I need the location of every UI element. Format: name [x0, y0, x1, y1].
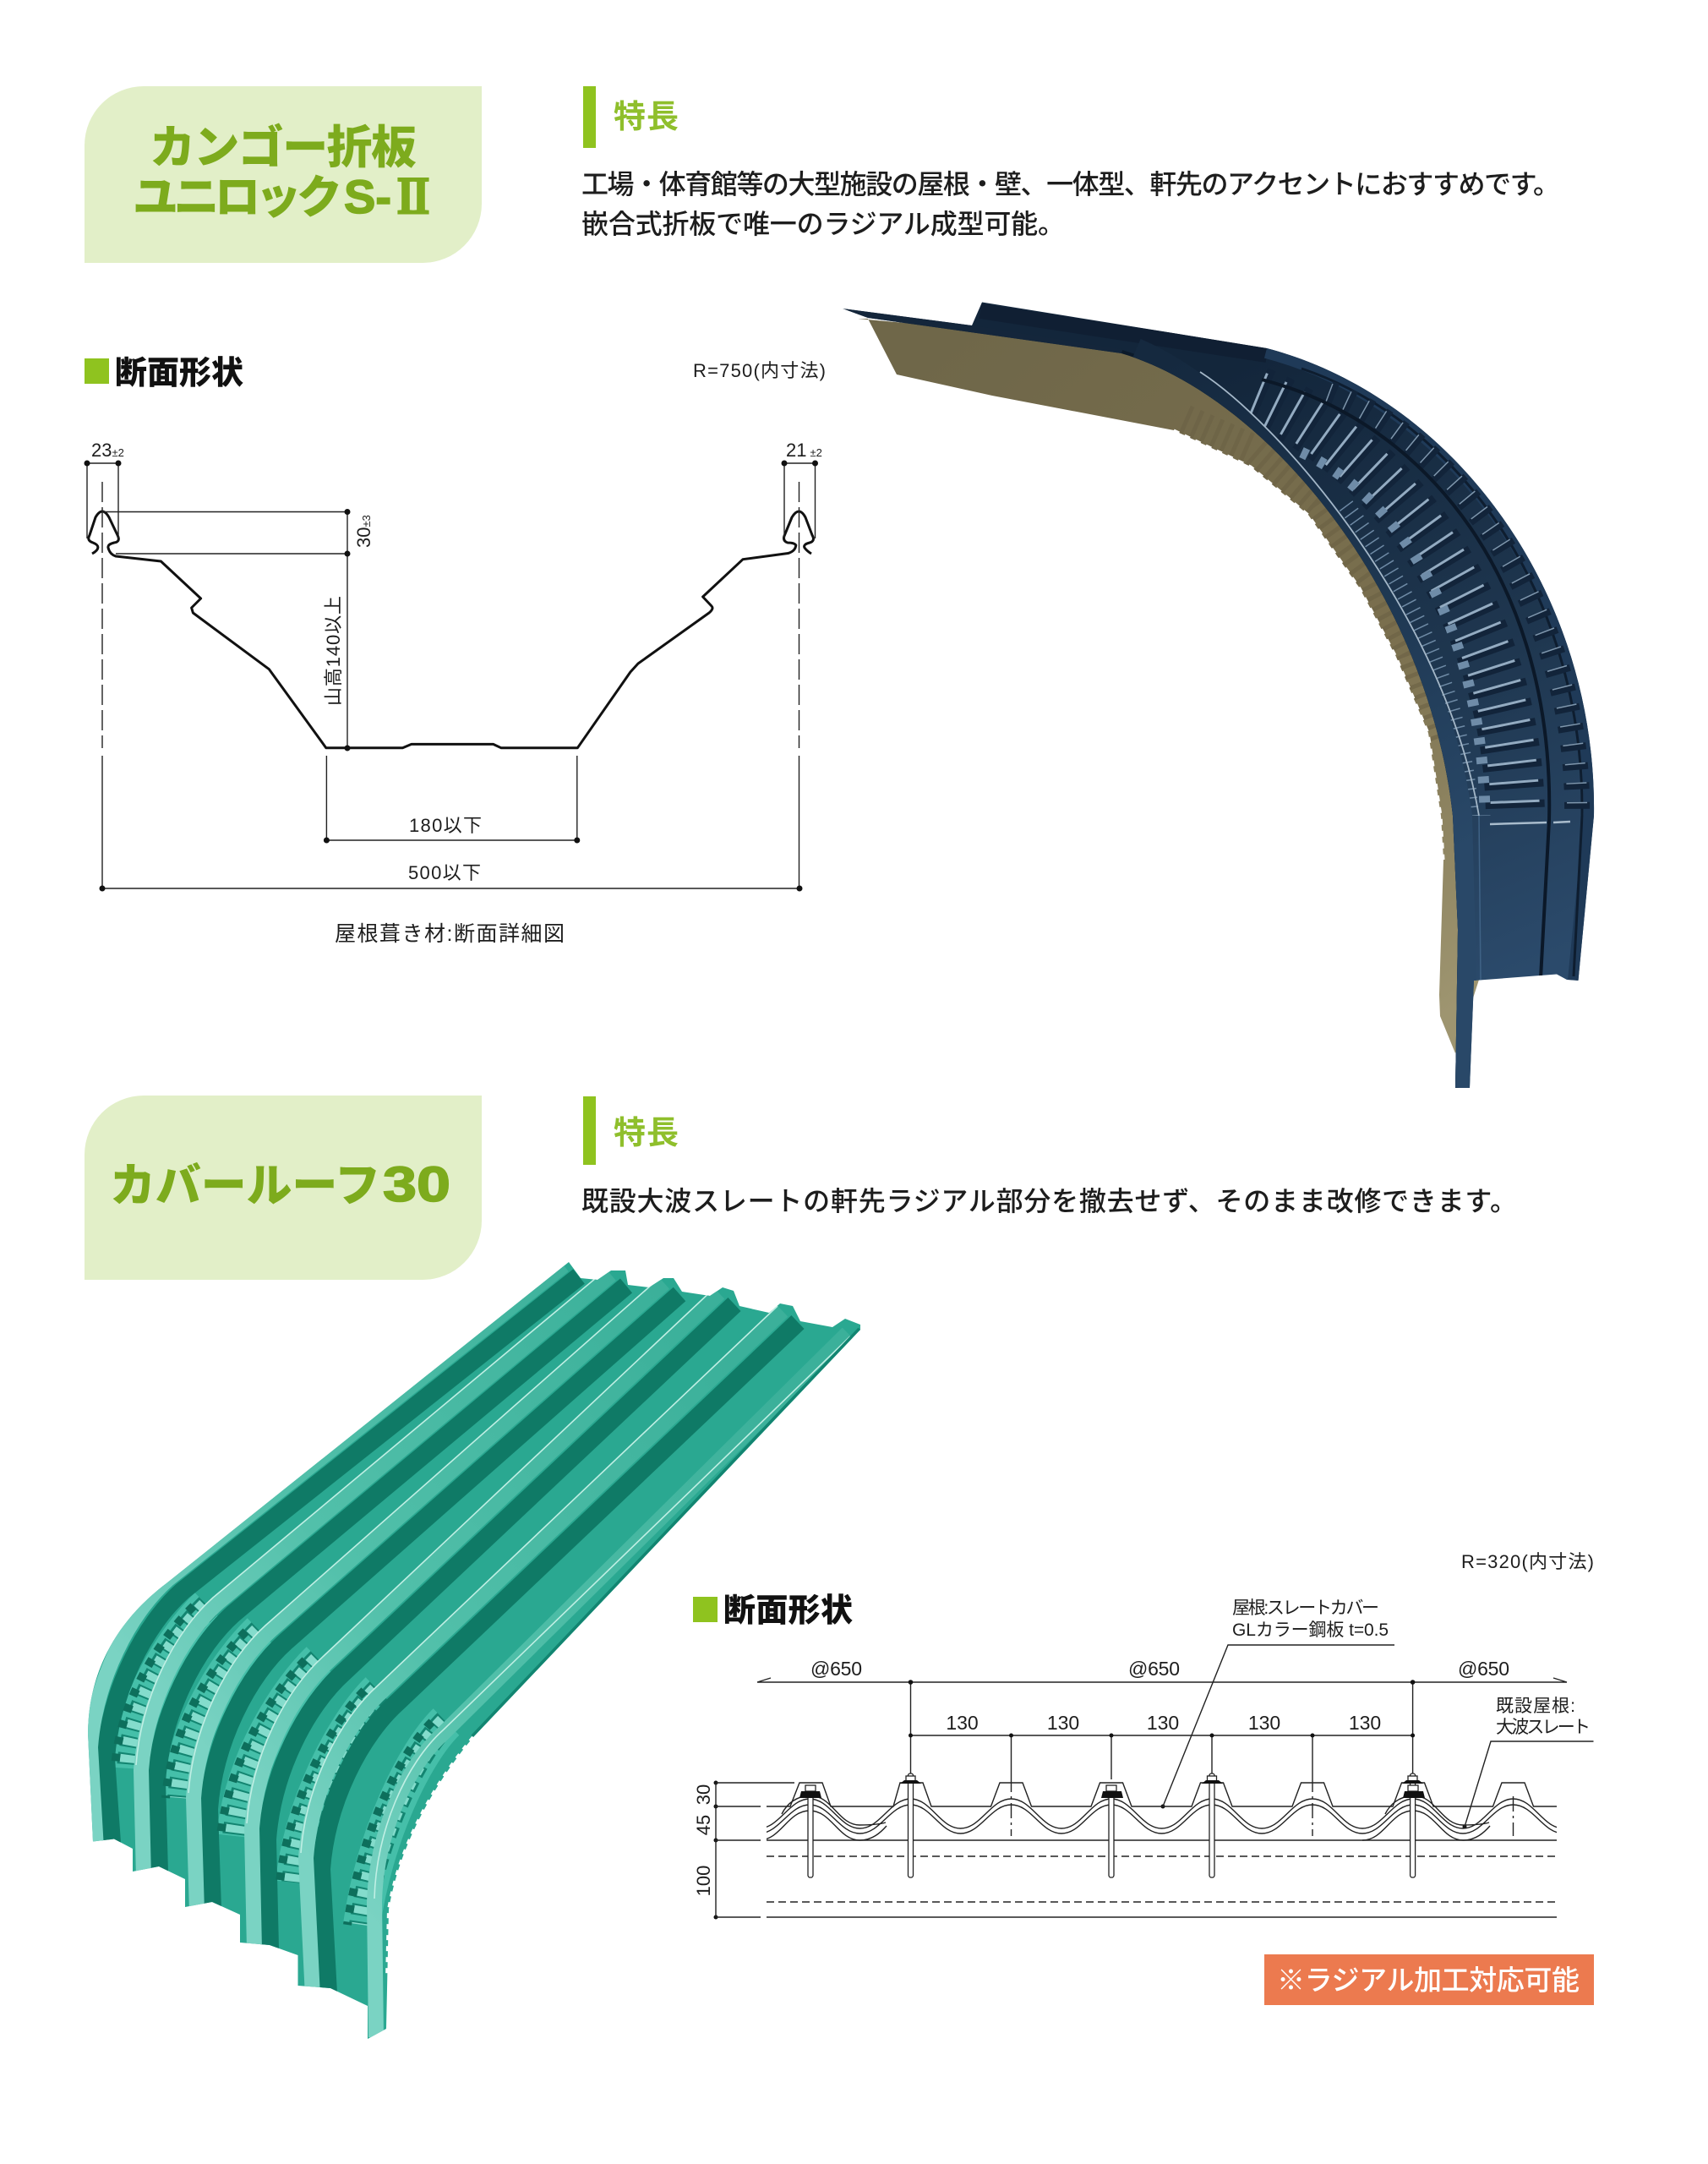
heading: features: 特長 [614, 100, 679, 135]
labels: 650 pitch: @650 [1128, 1658, 1180, 1680]
chart: unilock cross-section drawing [85, 440, 822, 946]
panel: product 2 features [581, 1096, 1517, 1216]
label: existing roof line 2: 大波スレート [1496, 1718, 1591, 1737]
leader: existing roof label [1465, 1741, 1594, 1827]
labels: 130 spacing: 130 [1349, 1712, 1381, 1734]
labels: 650 pitch: @650 [1458, 1658, 1509, 1680]
photo: navy radial folded panel [843, 303, 1594, 1088]
title: kango orihan: カンゴー折板 [150, 122, 417, 173]
text block: feature line: 既設大波スレートの軒先ラジアル部分を撤去せず、そのまま改修できます。 [581, 1186, 1517, 1216]
label: 21 plus-minus 2: 21 ±2 [786, 440, 822, 461]
callout: radial processing available: ※ラジアル加工対応可能 [1277, 1965, 1580, 1996]
panel: product 1 title card [85, 86, 482, 263]
title: number 30: 30 [383, 1157, 450, 1212]
labels: height dimensions: 30 [693, 1784, 714, 1805]
panel: product 2 title card [85, 1096, 482, 1280]
labels: height dimensions: 45 [693, 1815, 714, 1835]
panel: product 1 features [581, 86, 1560, 239]
label: roof cover material line 1: 屋根:スレートカバー [1232, 1598, 1379, 1618]
photo: green cover roof sheet [88, 1262, 860, 2039]
labels: 130 spacing: 130 [1248, 1712, 1280, 1734]
title: unilock: ユニロック [133, 172, 342, 223]
label: 500 or less: 500以下 [408, 862, 481, 883]
labels: 130 spacing [946, 1712, 1381, 1734]
text: radius note 2: R=320(内寸法) [1461, 1551, 1594, 1572]
chart: cover roof cross-section drawing [693, 1598, 1594, 1919]
title: roman numeral II: Ⅱ [392, 172, 434, 223]
label: ridge height: 山高140以上 [323, 596, 344, 706]
title: S-: S- [344, 170, 391, 223]
heading: cross-section shape 1: 断面形状 [115, 356, 243, 391]
text block: feature line 2: 嵌合式折板で唯一のラジアル成型可能。 [581, 209, 1065, 239]
labels: 650 pitch [810, 1658, 1509, 1680]
text block: feature line 1: 工場・体育館等の大型施設の屋根・壁、一体型、軒先のアクセントにおすすめです。 [581, 169, 1560, 199]
label: 30 plus-minus 3: 30±3 [353, 515, 374, 548]
label: roof cover material line 2: GLカラー鋼板 t=0.5 [1232, 1620, 1389, 1640]
text: radius note 1: R=750(内寸法) [693, 360, 826, 381]
label: 23 plus-minus 2: 23±2 [91, 440, 124, 461]
labels: 130 spacing: 130 [1147, 1712, 1179, 1734]
leader: roof label [1163, 1645, 1394, 1806]
labels: height dimensions [693, 1784, 714, 1896]
labels: 130 spacing: 130 [1047, 1712, 1079, 1734]
label: existing roof line 1: 既設屋根: [1496, 1697, 1575, 1716]
title: cover roof: カバールーフ [110, 1161, 380, 1211]
labels: height dimensions: 100 [693, 1866, 714, 1896]
labels: 650 pitch: @650 [810, 1658, 862, 1680]
label: 180 or less: 180以下 [409, 815, 482, 836]
callout: radial processing available [1264, 1954, 1594, 2005]
caption: section detail: 屋根葺き材:断面詳細図 [335, 922, 565, 946]
heading: features: 特長 [614, 1116, 679, 1151]
labels: 130 spacing: 130 [946, 1712, 979, 1734]
heading: cross-section shape 2: 断面形状 [723, 1593, 853, 1629]
